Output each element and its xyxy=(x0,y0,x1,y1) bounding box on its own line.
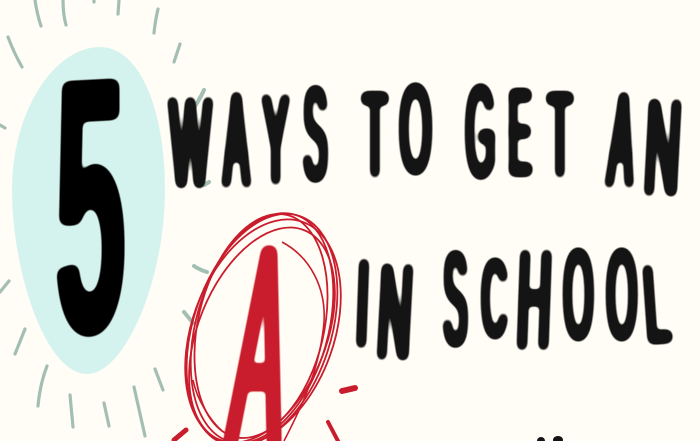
heading line 1: WAYS TO GET AN: Y xyxy=(263,69,288,210)
red scribbled circle xyxy=(156,195,370,441)
heading line 2: IN SCHOOL: N xyxy=(374,238,416,387)
heading line 1: WAYS TO GET AN: N xyxy=(641,73,684,223)
number blob xyxy=(12,47,165,374)
heading line 2: IN SCHOOL xyxy=(354,223,673,387)
heading line 2: IN SCHOOL: C xyxy=(482,239,507,360)
heading line 1: WAYS TO GET AN: T xyxy=(363,68,387,202)
heading line 1: WAYS TO GET AN: S xyxy=(304,61,327,208)
sunburst rays xyxy=(0,0,209,436)
heading line 2: IN SCHOOL: O xyxy=(564,225,593,365)
number 5: 5 xyxy=(55,2,126,410)
heading line 2: IN SCHOOL: O xyxy=(607,224,637,365)
heading line 1: WAYS TO GET AN: W xyxy=(170,72,211,213)
heading line 2: IN SCHOOL: H xyxy=(515,223,554,379)
heading line 1: WAYS TO GET AN: G xyxy=(466,60,495,205)
heading line 1: WAYS TO GET AN: A xyxy=(224,65,249,215)
heading line 2: IN SCHOOL: S xyxy=(444,226,467,373)
heading line 1: WAYS TO GET AN: A xyxy=(605,65,638,215)
heading line 1: WAYS TO GET AN: O xyxy=(400,60,431,199)
heading line 2: IN SCHOOL: L xyxy=(640,242,673,366)
heading line 1: WAYS TO GET AN: T xyxy=(548,68,572,202)
next section text tips xyxy=(537,436,563,441)
heading line 2: IN SCHOOL: I xyxy=(354,234,371,373)
heading line 1: WAYS TO GET AN: E xyxy=(509,65,531,200)
heading line 1: WAYS TO GET AN xyxy=(170,60,684,223)
red accent marks xyxy=(174,388,355,441)
